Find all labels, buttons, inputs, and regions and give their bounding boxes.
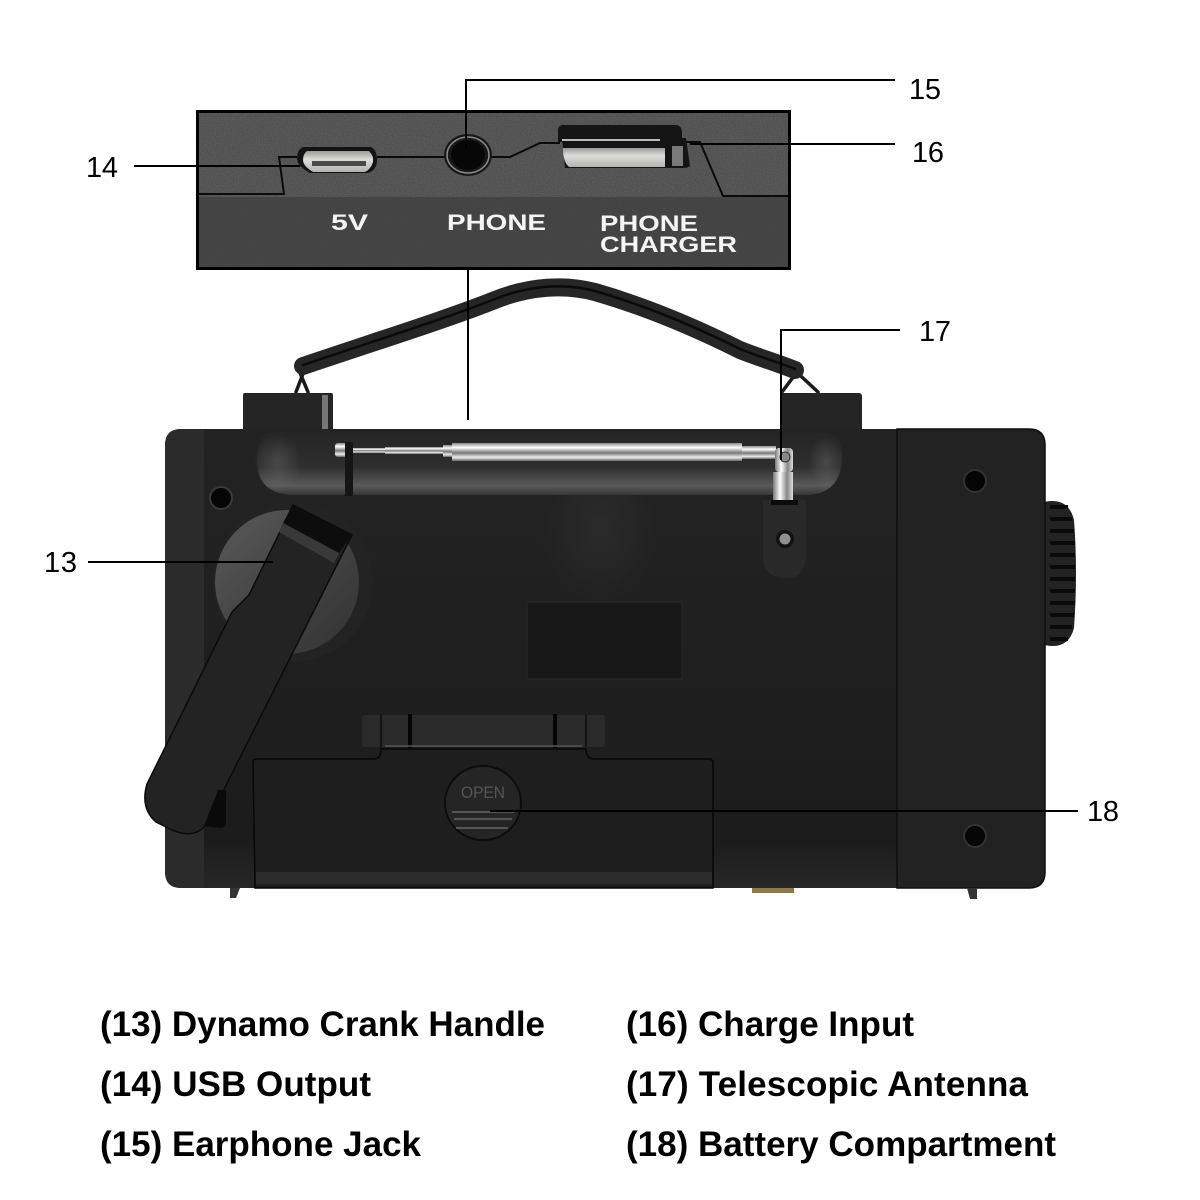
legend: (16) Charge Input — [626, 1005, 914, 1044]
mounting lug left — [243, 393, 333, 433]
right battery block — [897, 429, 1045, 888]
antenna channel — [257, 432, 842, 495]
legend: (15) Earphone Jack — [100, 1125, 422, 1164]
callout 15 — [466, 74, 941, 148]
connector from inset to radio — [467, 269, 469, 420]
inset lower strip — [198, 197, 789, 268]
crank tab — [204, 790, 226, 828]
inset panel: port close-up — [198, 112, 790, 268]
radio body — [165, 393, 1076, 899]
antenna mount — [763, 500, 806, 578]
phone charger usb port — [558, 125, 690, 168]
printed label PHONE CHARGER: PHONE — [600, 211, 698, 236]
label recess — [527, 602, 682, 679]
hinge — [362, 714, 605, 748]
callout 18: 18 — [1087, 796, 1119, 828]
callout 14: 14 — [86, 152, 118, 184]
carrying handle — [296, 286, 818, 392]
battery compartment door — [253, 749, 713, 888]
legend — [100, 1005, 1056, 1164]
callout 15: 15 — [909, 74, 941, 106]
usb port — [297, 147, 377, 173]
door open coin slot — [445, 766, 521, 840]
callout 13: 13 — [44, 547, 77, 579]
printed label PHONE CHARGER: CHARGER — [600, 232, 737, 257]
main housing — [165, 429, 1045, 888]
callout 16: 16 — [912, 137, 944, 169]
tuning knob — [1040, 501, 1076, 646]
legend: (14) USB Output — [100, 1065, 371, 1104]
channel end highlight left — [254, 434, 302, 490]
foot left — [230, 888, 240, 898]
crank lever — [145, 505, 352, 834]
channel end highlight right — [808, 436, 844, 488]
callout 17 — [781, 316, 951, 460]
telescopic antenna — [335, 442, 806, 578]
housing reflection — [540, 455, 660, 605]
mounting hole bottom right — [964, 825, 986, 847]
printed label PHONE CHARGER — [600, 211, 737, 257]
crank disc — [213, 502, 373, 662]
legend: (18) Battery Compartment — [626, 1125, 1056, 1164]
dynamo crank — [145, 502, 373, 834]
earphone jack — [444, 134, 492, 176]
door open coin slot: OPEN — [461, 783, 505, 802]
mounting hole top left — [210, 487, 232, 509]
left side strip — [165, 429, 204, 888]
inset frame — [198, 112, 790, 268]
antenna swivel — [773, 448, 793, 504]
foot right — [967, 888, 977, 899]
printed label PHONE: PHONE — [447, 210, 546, 235]
mounting lug right — [780, 393, 862, 433]
seam line — [198, 142, 790, 196]
printed label 5V: 5V — [331, 210, 368, 235]
callout 17: 17 — [919, 316, 951, 348]
mounting hole top right — [964, 470, 986, 492]
legend: (13) Dynamo Crank Handle — [100, 1005, 545, 1044]
foot center — [752, 888, 794, 893]
legend: (17) Telescopic Antenna — [626, 1065, 1029, 1104]
